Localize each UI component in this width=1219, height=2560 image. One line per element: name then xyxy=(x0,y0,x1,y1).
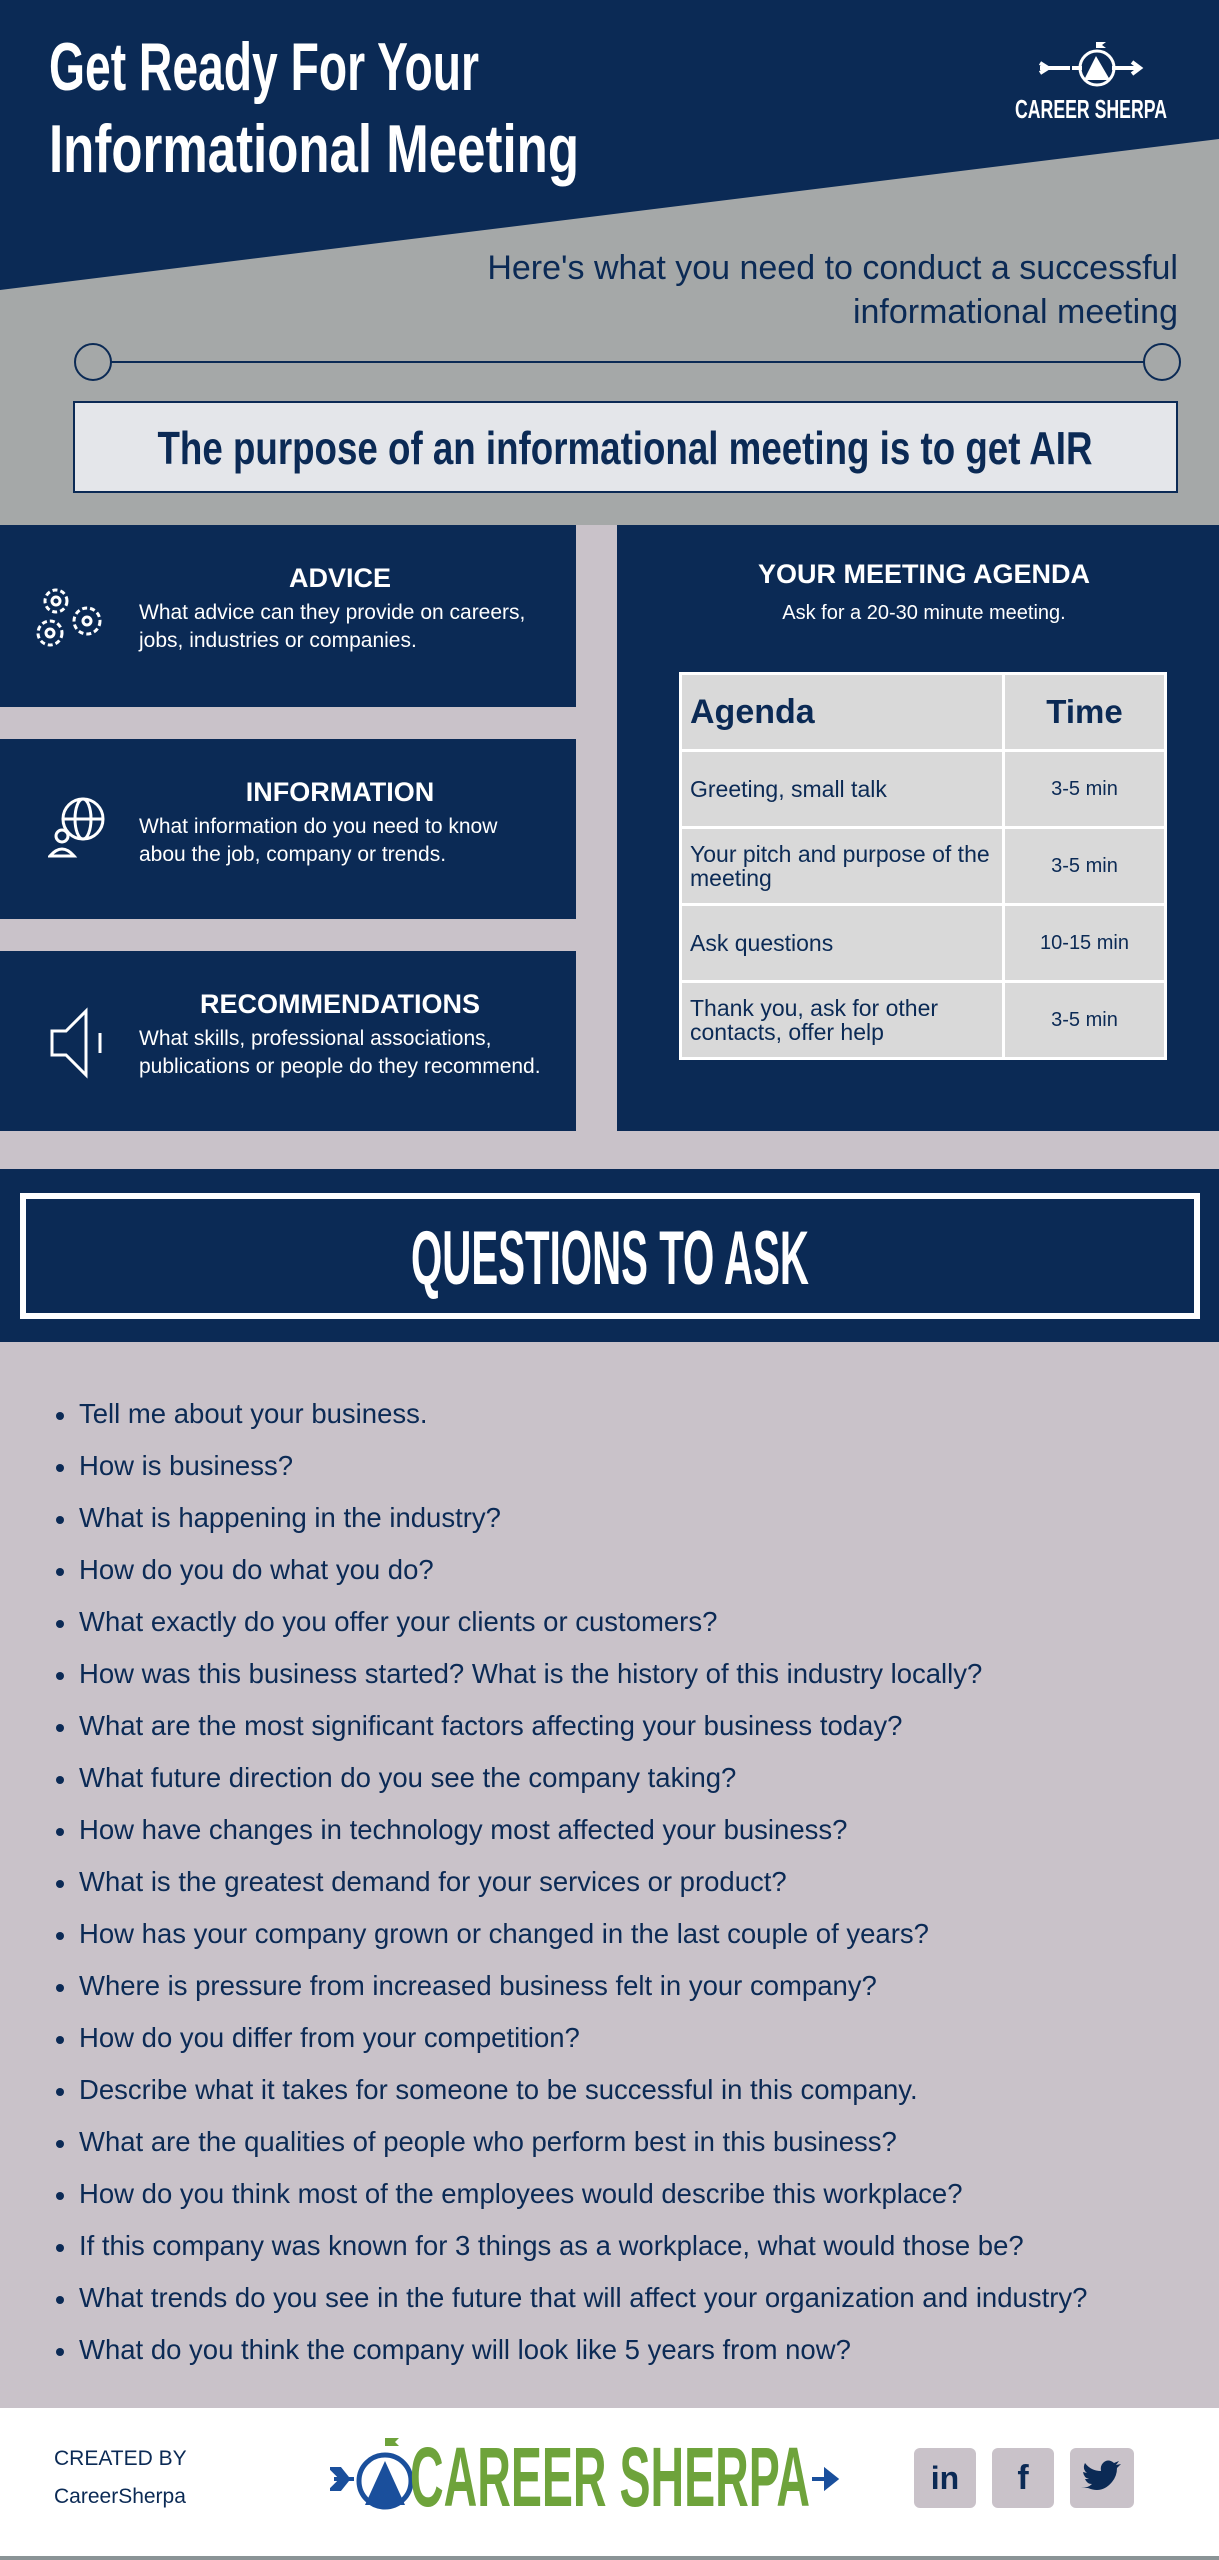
subtitle: informational meeting xyxy=(853,293,1178,331)
text: How have changes in technology most affected your business? xyxy=(79,1814,847,1845)
panel: advice xyxy=(0,525,576,707)
text: Where is pressure from increased business felt in your company? xyxy=(79,1970,877,2001)
questions list xyxy=(56,1398,1087,2365)
text: How do you think most of the employees would describe this workplace? xyxy=(79,2178,963,2209)
icon: gears xyxy=(36,588,102,646)
agenda table: Thank you, ask for other contacts, offer help xyxy=(690,995,938,1045)
text: How is business? xyxy=(79,1450,293,1481)
text: What future direction do you see the company taking? xyxy=(79,1762,736,1793)
panel: information: abou the job, company or trends. xyxy=(139,843,446,866)
panel: information xyxy=(0,739,576,919)
header background xyxy=(0,0,1219,525)
panel: recommendations xyxy=(0,951,576,1131)
panel: advice: What advice can they provide on careers, xyxy=(139,601,525,624)
icon: speaker xyxy=(50,1008,102,1078)
agenda table: 3-5 min xyxy=(1051,1009,1118,1031)
created by: CareerSherpa xyxy=(54,2485,186,2508)
agenda table: Ask questions xyxy=(690,930,833,956)
questions heading: QUESTIONS TO ASK xyxy=(411,1216,809,1301)
text: What exactly do you offer your clients or customers? xyxy=(79,1606,717,1637)
created by xyxy=(54,2447,187,2508)
icons: social: in xyxy=(931,2460,959,2496)
AIR purpose box xyxy=(73,401,1178,493)
panel: meeting agenda xyxy=(617,525,1219,1131)
text: What is the greatest demand for your services or product? xyxy=(79,1866,787,1897)
text: What do you think the company will look like 5 years from now? xyxy=(79,2334,851,2365)
agenda heading: YOUR MEETING AGENDA xyxy=(758,559,1090,589)
text: What is happening in the industry? xyxy=(79,1502,501,1533)
text: Describe what it takes for someone to be successful in this company. xyxy=(79,2074,918,2105)
text: Tell me about your business. xyxy=(79,1398,428,1429)
text: How has your company grown or changed in the last couple of years? xyxy=(79,1918,929,1949)
agenda table: 3-5 min xyxy=(1051,778,1118,800)
created by: CREATED BY xyxy=(54,2447,187,2470)
text: What trends do you see in the future that will affect your organization and industry? xyxy=(79,2282,1087,2313)
agenda table: 10-15 min xyxy=(1040,932,1129,954)
text: How do you do what you do? xyxy=(79,1554,434,1585)
questions band xyxy=(0,1169,1219,1342)
text: How was this business started? What is the history of this industry locally? xyxy=(79,1658,982,1689)
panel: advice: ADVICE xyxy=(289,563,391,593)
subtitle xyxy=(487,249,1178,331)
icons: social: f xyxy=(1017,2459,1029,2497)
agenda table: Greeting, small talk xyxy=(690,776,887,802)
agenda note: Ask for a 20-30 minute meeting. xyxy=(782,602,1066,624)
logo: career sherpa header xyxy=(1015,42,1167,124)
panel: information: What information do you need to know xyxy=(139,815,497,838)
agenda table: Time xyxy=(1046,693,1123,730)
agenda table: Your pitch and purpose of the meeting xyxy=(690,841,990,891)
icons: social xyxy=(914,2448,1134,2508)
agenda table: Agenda xyxy=(690,693,815,731)
subtitle: Here's what you need to conduct a successful xyxy=(487,249,1178,287)
panel: advice: jobs, industries or companies. xyxy=(139,629,417,652)
panel: recommendations: publications or people do they recommend. xyxy=(139,1055,541,1078)
questions heading xyxy=(20,1193,1200,1319)
title xyxy=(49,29,579,187)
icon: globe person xyxy=(48,798,104,858)
text: If this company was known for 3 things as a workplace, what would those be? xyxy=(79,2230,1024,2261)
agenda table: 3-5 min xyxy=(1051,855,1118,877)
footer xyxy=(0,2408,1219,2560)
panel: recommendations: RECOMMENDATIONS xyxy=(200,989,480,1019)
panel: recommendations: What skills, professional associations, xyxy=(139,1027,491,1050)
text: How do you differ from your competition? xyxy=(79,2022,580,2053)
text: What are the qualities of people who perform best in this business? xyxy=(79,2126,897,2157)
panel: information: INFORMATION xyxy=(246,777,434,807)
text: What are the most significant factors affecting your business today? xyxy=(79,1710,902,1741)
agenda table xyxy=(679,672,1167,1060)
